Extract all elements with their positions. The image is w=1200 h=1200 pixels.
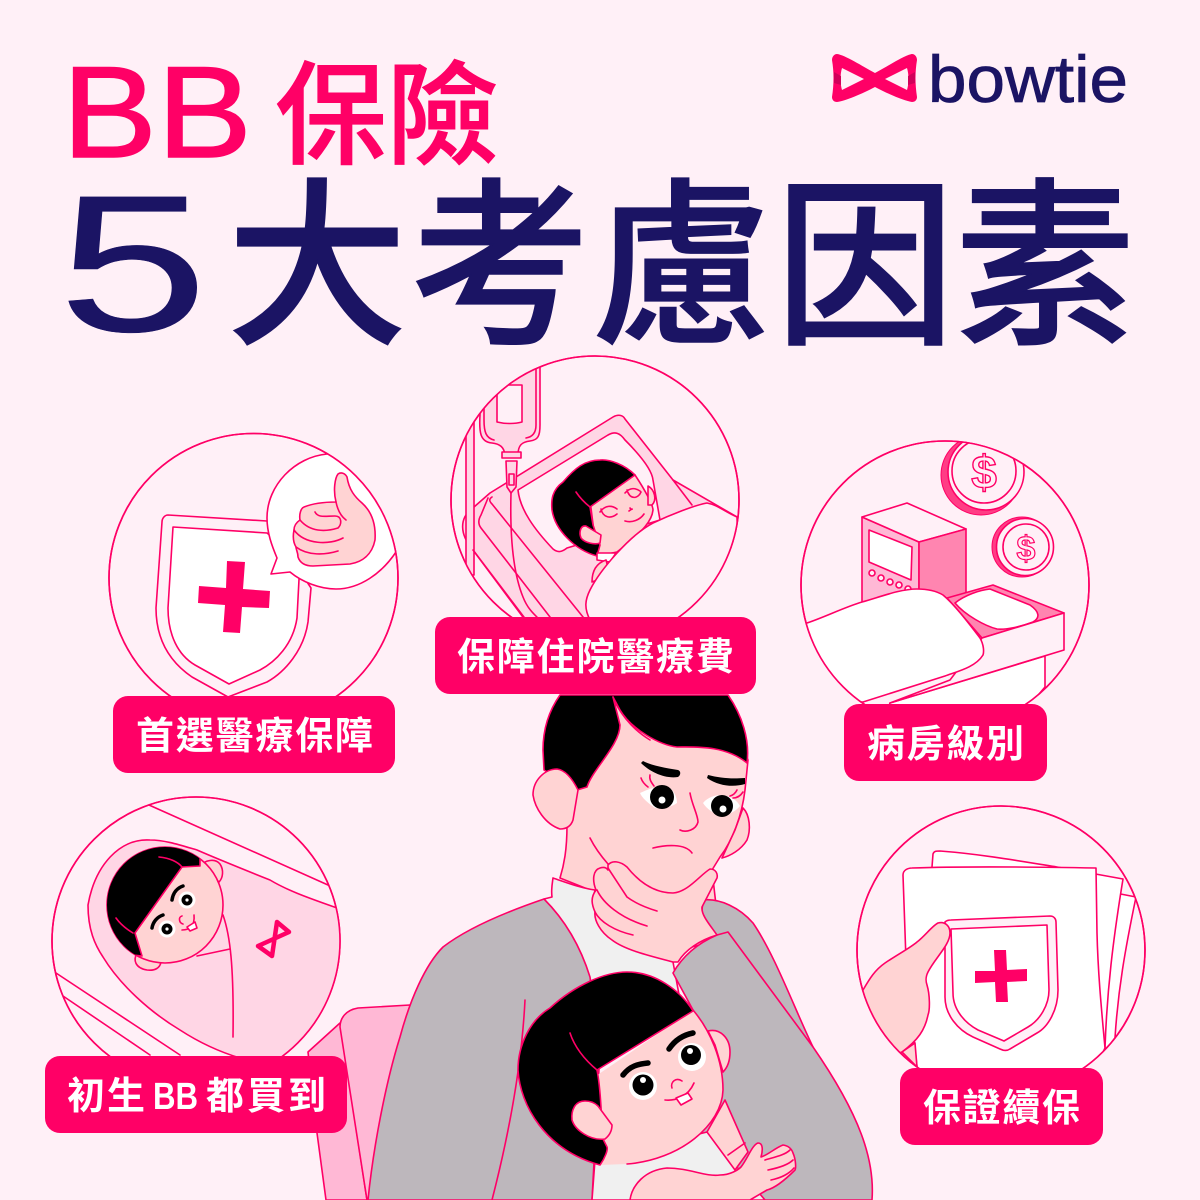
father left ear: [533, 769, 578, 829]
father back shoulder: [702, 900, 813, 1047]
IV label: [497, 385, 522, 424]
father left jacket: [368, 899, 600, 1200]
label: 保障住院醫療費: 保障住院醫療費: [457, 637, 734, 679]
hand finger lines: [595, 868, 657, 935]
baby left ear: [572, 1101, 612, 1139]
father jaw line: [590, 838, 608, 864]
blanket: [790, 589, 984, 702]
coin small: [992, 517, 1054, 577]
IV tube: [472, 493, 538, 617]
father right eye: [703, 790, 743, 817]
chair behind father: [308, 1005, 420, 1200]
baby tooth: [187, 922, 197, 931]
holding hand: [850, 923, 950, 1060]
father hand on chin: [592, 862, 717, 962]
baby hair: [518, 972, 693, 1165]
shield inner: [168, 527, 300, 684]
coin large: $: [971, 446, 997, 498]
baby eyes: [629, 1043, 706, 1100]
label: 初生 BB 都買到: 都買到: [206, 1076, 326, 1118]
baby finger lines and cuff: [728, 1143, 794, 1180]
bed headboard: [947, 585, 1064, 638]
label: 保證續保: 保證續保: [923, 1088, 1080, 1130]
baby hair: [90, 830, 200, 956]
child closed eyes and smile: [600, 489, 644, 522]
child ear right: [648, 486, 655, 505]
pillow: [518, 433, 660, 552]
title line 1: BB 保險: 保險: [275, 26, 499, 188]
father neck and face: [548, 705, 748, 960]
logo: bowtie: [832, 42, 1128, 116]
father nose and mouth: [653, 793, 698, 853]
panel: bottom-right renewal circle: [850, 806, 1145, 1100]
title line 2: 5 大考慮因素: 大: [227, 121, 407, 382]
baby face: [590, 1010, 723, 1165]
swaddle bow logo: [258, 922, 289, 956]
baby brows: [152, 886, 183, 928]
title line 1: BB 保險: [62, 26, 499, 188]
blanket bands: [56, 805, 328, 1055]
baby nose and mouth: [665, 1080, 694, 1100]
child collar: [597, 553, 616, 562]
panel: top-centre hospital circle: [450, 355, 740, 617]
shield outer: [156, 515, 311, 697]
certificate cross: [975, 950, 1027, 1002]
logo bow icon: [832, 54, 917, 102]
coin large: [941, 434, 1024, 515]
baby eyebrows: [623, 1033, 693, 1075]
baby head right ear: [200, 860, 223, 882]
bed pillow: [955, 589, 1038, 629]
certificate shield outer: [945, 916, 1058, 1050]
coin small: $: [1017, 530, 1036, 568]
bed rail: [478, 479, 693, 617]
label: 首選醫療保障: 首選醫療保障: [136, 716, 373, 758]
baby face: [107, 847, 223, 963]
back paper 2: [932, 851, 1123, 1060]
panel: top-right ward class circle: [800, 440, 1090, 704]
wrist cuff piece: [902, 1043, 917, 1067]
title line 1: BB 保險: BB: [62, 39, 252, 185]
father illustration: [368, 695, 872, 1200]
label: 首選醫療保障: [113, 696, 395, 773]
title line 2: 5 大考慮因素: 考: [410, 121, 590, 382]
thumb finger lines: [294, 502, 346, 554]
label: 初生 BB 都買到: 初生: [67, 1076, 145, 1118]
child ear left: [580, 526, 601, 544]
IV bag inner line: [483, 369, 537, 441]
bed frame: [462, 414, 738, 617]
baby far arm: [707, 1100, 748, 1170]
certificate shield inner: [951, 925, 1049, 1041]
father eyebrows: [641, 761, 745, 786]
title line 2: 5 大考慮因素: 因: [775, 121, 955, 382]
bed side: [888, 656, 1046, 704]
baby head bottom ear: [135, 953, 161, 970]
thumb up hand: [293, 473, 375, 566]
hair part line: [613, 697, 650, 740]
label: 初生 BB 都買到: [45, 1056, 347, 1133]
title line 2: 5 大考慮因素: 慮: [592, 121, 772, 382]
shoulder: [592, 560, 610, 582]
jacket fold line: [492, 1000, 525, 1200]
baby nose and mouth: [179, 915, 194, 930]
label: 保障住院醫療費: [435, 617, 756, 694]
baby tooth: [676, 1093, 692, 1105]
baby hair part line: [116, 857, 182, 933]
shield cross: [198, 561, 270, 633]
label: 病房級別: [844, 704, 1047, 781]
panel: top-left coverage circle: [109, 434, 400, 722]
baby shirt: [592, 1132, 765, 1200]
panel: bottom-left newborn circle: [51, 796, 341, 1056]
back paper 3: [1100, 890, 1136, 1060]
baby right ear: [708, 1030, 730, 1072]
bed rail front: [890, 613, 1064, 703]
baby in father's arms: [518, 972, 796, 1200]
father right ear: [722, 808, 749, 858]
baby hair part line: [570, 1033, 597, 1070]
label: 初生 BB 都買到: BB: [153, 1076, 198, 1118]
swaddle: [88, 840, 345, 1060]
child hair part line: [576, 492, 590, 507]
swaddle fold: [197, 915, 233, 1037]
main paper: [903, 867, 1105, 1100]
father hair: [543, 695, 748, 790]
label: 病房級別: 病房級別: [867, 724, 1024, 766]
father left eye: [640, 775, 677, 809]
sleeping child face: [590, 475, 653, 556]
logo wordmark: bowtie: [928, 42, 1128, 116]
title line 2: 5 大考慮因素: 素: [955, 121, 1135, 382]
father shirt: [544, 878, 680, 1000]
label: 保證續保: [900, 1068, 1103, 1145]
baby eyes: [158, 892, 196, 938]
thumbs up speech bubble: [267, 450, 400, 589]
IV bag: [478, 368, 541, 452]
blanket: [585, 502, 738, 617]
title line 2: 5 大考慮因素: [58, 121, 1135, 382]
IV connector: [502, 452, 521, 493]
monitor machine: [862, 503, 966, 610]
IV pole: [465, 422, 475, 576]
baby near arm and hand: [630, 1143, 796, 1200]
title line 2: 5 大考慮因素: 5: [58, 155, 208, 373]
father right arm: [673, 932, 872, 1200]
sleeping child hair: [552, 460, 635, 556]
